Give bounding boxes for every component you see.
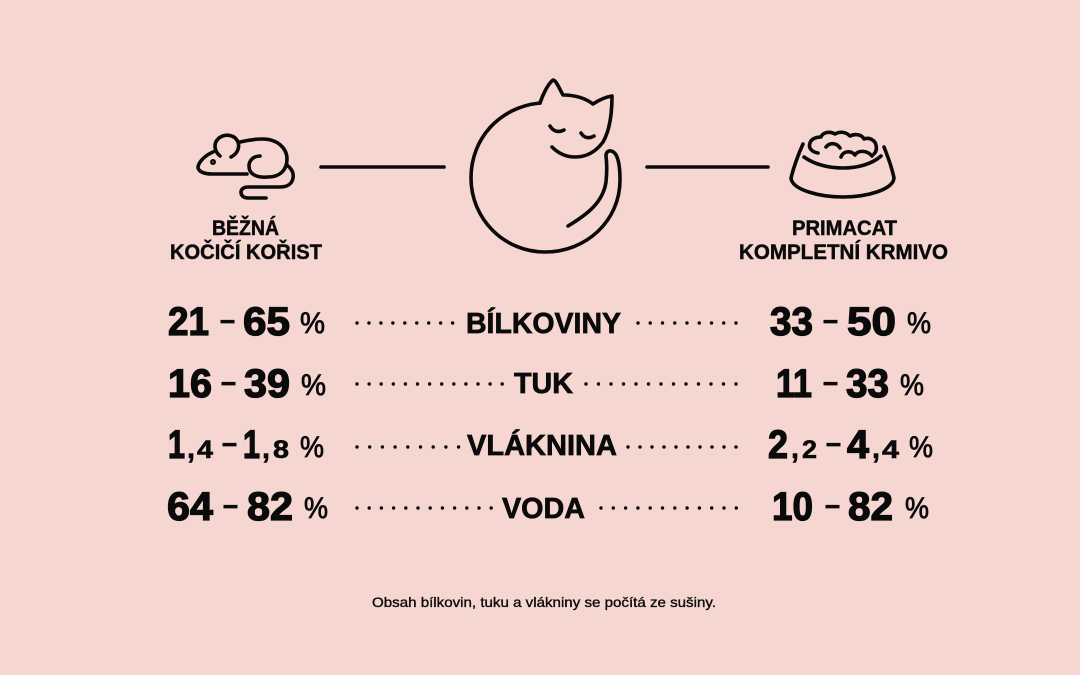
row: protein [168, 300, 931, 344]
prey value: fat [168, 362, 326, 406]
connector line: right [647, 165, 768, 169]
heading: Primacat complete food [739, 217, 948, 264]
food value: fibre: 4 [847, 423, 870, 467]
prey value: fibre: 4 [197, 436, 213, 464]
food value: fibre: 4 [882, 436, 899, 464]
row: water [167, 485, 929, 529]
prey value: fibre: – [222, 427, 237, 458]
food value: fat: 11 [776, 362, 812, 406]
prey value: fibre: 1 [243, 423, 260, 467]
prey value: fibre: , [187, 432, 195, 465]
prey value: fibre [168, 423, 324, 467]
food value: fat [776, 362, 924, 406]
food value: protein: % [907, 307, 931, 340]
food value: water: – [825, 489, 840, 520]
icon: food bowl [791, 132, 894, 197]
heading: common cat prey: BĚŽNÁ [212, 216, 279, 240]
label: water: VODA [502, 493, 585, 525]
heading: common cat prey [170, 216, 322, 264]
food value: protein [770, 300, 931, 344]
food value: fat: 33 [846, 362, 889, 406]
dotted leader [357, 321, 453, 325]
label: fat: TUK [514, 368, 573, 400]
row: fibre [168, 423, 933, 467]
prey value: protein: 21 [168, 300, 209, 344]
food value: protein: 33 [770, 300, 813, 344]
food value: fibre [768, 423, 933, 467]
dotted leader [601, 506, 737, 510]
dotted leader [357, 445, 459, 449]
label: protein: BÍLKOVINY [466, 306, 621, 340]
prey value: water: 82 [247, 485, 293, 529]
prey value: protein [168, 300, 325, 344]
prey value: protein: – [220, 304, 235, 335]
prey value: fibre: 1 [168, 423, 185, 467]
prey value: water: % [304, 492, 328, 525]
food value: water: 82 [848, 485, 893, 529]
prey value: water: – [223, 489, 238, 520]
dotted leader [357, 506, 493, 510]
connector line: left [321, 165, 444, 169]
food value: fat: % [900, 369, 924, 402]
food value: fibre: 2 [802, 436, 817, 464]
dotted leader [628, 445, 737, 449]
prey value: water [167, 485, 328, 529]
prey value: fat: 16 [168, 362, 212, 406]
row: fat [168, 362, 924, 406]
food value: protein: – [823, 304, 838, 335]
food value: fibre: , [872, 432, 880, 465]
prey value: fibre: , [262, 432, 270, 465]
prey value: fibre: % [300, 431, 324, 464]
food value: protein: 50 [847, 300, 896, 344]
heading: common cat prey: KOČIČÍ KOŘIST [170, 240, 322, 264]
food value: fibre: , [791, 432, 799, 465]
food value: water: % [905, 492, 929, 525]
icon: mouse [198, 135, 293, 198]
food value: fibre: % [909, 431, 933, 464]
dotted leader [586, 382, 737, 386]
prey value: protein: % [300, 307, 325, 340]
footnote: Obsah bílkovin, tuku a vlákniny se počítá ze sušiny. [372, 594, 716, 610]
food value: fibre: 2 [768, 423, 788, 467]
prey value: fat: % [301, 369, 326, 402]
prey value: fat: – [221, 366, 236, 397]
prey value: fibre: 8 [273, 436, 289, 464]
prey value: fat: 39 [244, 362, 290, 406]
food value: water: 10 [772, 485, 813, 529]
dotted leader [638, 321, 737, 325]
heading: Primacat complete food: KOMPLETNÍ KRMIVO [739, 241, 948, 264]
food value: water [772, 485, 929, 529]
prey value: water: 64 [167, 485, 214, 529]
label: fibre: VLÁKNINA [467, 428, 617, 462]
food value: fibre: – [826, 427, 841, 458]
food value: fat: – [823, 366, 838, 397]
heading: Primacat complete food: PRIMACAT [792, 217, 897, 240]
prey value: protein: 65 [243, 300, 290, 344]
icon: sleeping cat [471, 80, 620, 252]
dotted leader [357, 382, 503, 386]
